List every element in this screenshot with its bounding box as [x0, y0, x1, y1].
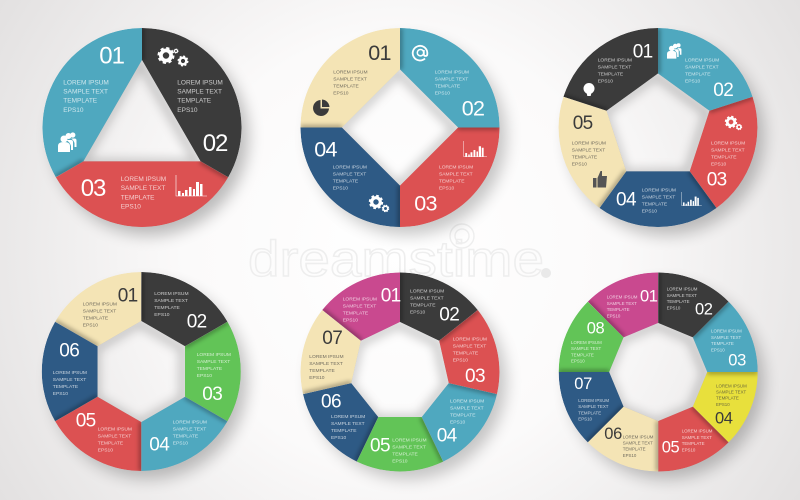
- segment 05: [357, 417, 443, 471]
- segment 04: [300, 128, 400, 227]
- text 03: EPS10: [121, 204, 141, 211]
- text 04: SAMPLE TEXT: [333, 171, 366, 177]
- text 02: LOREM IPSUM: [154, 292, 189, 297]
- text 01: TEMPLATE: [598, 71, 624, 77]
- segment 05: [658, 407, 729, 472]
- text 05: LOREM IPSUM: [682, 429, 712, 434]
- label 02: 02: [462, 97, 484, 121]
- label 02: 02: [695, 301, 713, 319]
- segment 03: [185, 322, 241, 421]
- text 03: EPS10: [711, 161, 727, 167]
- text 08: EPS10: [571, 359, 585, 364]
- segment 02: [400, 272, 478, 341]
- text 05: LOREM IPSUM: [392, 439, 427, 444]
- text 03: SAMPLE TEXT: [121, 185, 165, 192]
- segment 05: [55, 397, 141, 471]
- text 04: SAMPLE TEXT: [173, 426, 206, 432]
- text 01: EPS10: [333, 90, 349, 96]
- text 06: EPS10: [53, 391, 68, 397]
- text 02: SAMPLE TEXT: [667, 293, 697, 298]
- text 01: SAMPLE TEXT: [607, 301, 637, 306]
- text 03: TEMPLATE: [453, 351, 479, 357]
- text 04: TEMPLATE: [333, 178, 359, 184]
- segment 05: [559, 97, 626, 208]
- label 06: 06: [59, 341, 79, 362]
- text 05: SAMPLE TEXT: [392, 445, 426, 451]
- text 04: EPS10: [333, 185, 348, 191]
- text 05: SAMPLE TEXT: [682, 435, 712, 440]
- text 02: LOREM IPSUM: [667, 287, 697, 292]
- text 07: EPS10: [578, 417, 593, 422]
- text 01: LOREM IPSUM: [333, 70, 368, 75]
- label 03: 03: [465, 366, 485, 387]
- segment 04: [141, 397, 228, 471]
- text 02: TEMPLATE: [177, 98, 212, 105]
- text 04: EPS10: [716, 402, 730, 407]
- watermark: dreamstime: [248, 231, 544, 287]
- text 02: EPS10: [410, 309, 426, 315]
- text 01: SAMPLE TEXT: [333, 76, 367, 82]
- text 01: LOREM IPSUM: [598, 58, 632, 63]
- text 03: SAMPLE TEXT: [711, 335, 741, 340]
- text 04: SAMPLE TEXT: [642, 195, 675, 201]
- text 06: LOREM IPSUM: [623, 434, 653, 439]
- text 01: SAMPLE TEXT: [83, 308, 116, 314]
- segment 04: [422, 383, 497, 462]
- text 06: EPS10: [331, 435, 347, 441]
- text 07: LOREM IPSUM: [578, 398, 609, 403]
- icon: chart: [682, 192, 702, 206]
- text 04: EPS10: [642, 209, 657, 215]
- segment 03: [400, 128, 500, 227]
- text 03: EPS10: [453, 358, 468, 364]
- text 07: SAMPLE TEXT: [578, 404, 609, 409]
- text 07: LOREM IPSUM: [309, 355, 344, 360]
- label 01: 01: [640, 287, 658, 305]
- label 03: 03: [707, 170, 727, 191]
- text 06: SAMPLE TEXT: [331, 421, 365, 427]
- text 03: SAMPLE TEXT: [439, 171, 473, 177]
- chart: 7-part heptagon ring: [301, 272, 506, 479]
- text 05: LOREM IPSUM: [98, 428, 132, 433]
- text 01: SAMPLE TEXT: [63, 88, 108, 96]
- icon: bulb: [584, 83, 594, 96]
- chart: 6-part hexagon ring: [42, 272, 247, 479]
- label 02: 02: [187, 312, 207, 333]
- label 04: 04: [715, 409, 733, 427]
- chart: 5-part pentagon ring: [559, 28, 764, 235]
- label 04: 04: [149, 435, 170, 456]
- text 04: TEMPLATE: [450, 412, 476, 418]
- text 08: LOREM IPSUM: [571, 340, 602, 345]
- text 03: LOREM IPSUM: [711, 141, 745, 146]
- text 02: EPS10: [685, 78, 701, 84]
- text 02: EPS10: [177, 107, 198, 114]
- text 03: EPS10: [197, 373, 212, 379]
- text 06: TEMPLATE: [53, 384, 79, 390]
- text 06: EPS10: [623, 453, 637, 458]
- text 03: SAMPLE TEXT: [197, 359, 230, 365]
- label 01: 01: [368, 41, 391, 65]
- segment 06: [588, 407, 658, 472]
- text 01: SAMPLE TEXT: [598, 64, 631, 70]
- icon: pie: [313, 100, 330, 116]
- label 04: 04: [437, 426, 458, 447]
- text 02: TEMPLATE: [435, 83, 461, 89]
- text 05: SAMPLE TEXT: [98, 434, 131, 440]
- text 07: EPS10: [309, 375, 325, 381]
- text 04: SAMPLE TEXT: [450, 405, 484, 411]
- text 02: SAMPLE TEXT: [410, 295, 444, 301]
- text 01: LOREM IPSUM: [607, 295, 637, 300]
- text 02: TEMPLATE: [154, 305, 180, 311]
- text 06: TEMPLATE: [623, 447, 646, 452]
- label 03: 03: [202, 384, 222, 405]
- text 01: TEMPLATE: [607, 307, 630, 312]
- segment 01: [588, 272, 658, 337]
- text 05: EPS10: [98, 448, 113, 454]
- segment 03: [690, 97, 757, 208]
- text 01: EPS10: [83, 322, 98, 328]
- text 03: LOREM IPSUM: [453, 338, 487, 343]
- text 06: SAMPLE TEXT: [623, 440, 653, 446]
- text 02: LOREM IPSUM: [410, 289, 444, 294]
- text 05: TEMPLATE: [572, 154, 598, 160]
- text 02: TEMPLATE: [685, 71, 711, 77]
- label 01: 01: [381, 286, 401, 307]
- label 07: 07: [322, 328, 342, 349]
- icon: chart: [176, 175, 207, 196]
- text 06: LOREM IPSUM: [331, 415, 365, 420]
- segment 02: [658, 272, 729, 337]
- text 03: SAMPLE TEXT: [711, 147, 745, 153]
- text 07: TEMPLATE: [309, 368, 335, 374]
- text 04: LOREM IPSUM: [642, 189, 676, 194]
- text 07: SAMPLE TEXT: [309, 361, 343, 367]
- segment 02: [142, 28, 242, 177]
- text 03: LOREM IPSUM: [439, 165, 473, 170]
- label 04: 04: [314, 138, 338, 162]
- text 01: TEMPLATE: [63, 98, 98, 105]
- text 03: TEMPLATE: [711, 154, 737, 160]
- label 05: 05: [370, 436, 390, 457]
- icon: gears: [159, 48, 188, 66]
- label 03: 03: [414, 192, 438, 216]
- text 06: SAMPLE TEXT: [53, 377, 86, 383]
- label 04: 04: [616, 190, 637, 211]
- text 03: EPS10: [439, 185, 455, 191]
- segment 06: [303, 383, 378, 462]
- segment 02: [400, 28, 500, 128]
- text 05: TEMPLATE: [392, 452, 418, 458]
- label 06: 06: [604, 425, 622, 443]
- icon: thumb up: [593, 171, 607, 188]
- text 01: EPS10: [63, 107, 84, 114]
- icon: gears: [726, 117, 742, 130]
- text 03: TEMPLATE: [711, 341, 734, 346]
- label 08: 08: [587, 319, 604, 337]
- segment 04: [693, 372, 758, 442]
- label 03: 03: [81, 175, 106, 202]
- text 04: LOREM IPSUM: [333, 165, 367, 170]
- label 01: 01: [99, 42, 125, 69]
- segment 01: [322, 272, 400, 341]
- chart: 8-part octagon ring: [559, 272, 764, 479]
- text 03: LOREM IPSUM: [711, 329, 742, 334]
- text 05: EPS10: [392, 459, 408, 465]
- text 06: TEMPLATE: [331, 428, 357, 434]
- segment 02: [141, 272, 228, 346]
- segment 06: [42, 322, 98, 421]
- text 05: TEMPLATE: [98, 441, 124, 447]
- text 02: TEMPLATE: [667, 299, 690, 304]
- icon: gears: [370, 196, 389, 212]
- label 02: 02: [439, 304, 459, 325]
- text 02: LOREM IPSUM: [435, 70, 469, 75]
- text 03: TEMPLATE: [121, 194, 155, 201]
- text 01: LOREM IPSUM: [83, 302, 117, 307]
- segment 01: [563, 28, 658, 111]
- icon: people: [58, 132, 76, 152]
- label 02: 02: [713, 80, 733, 101]
- text 04: TEMPLATE: [716, 396, 739, 401]
- text 03: SAMPLE TEXT: [453, 344, 486, 350]
- text 05: TEMPLATE: [682, 441, 705, 446]
- label 03: 03: [728, 352, 746, 370]
- label 05: 05: [662, 438, 679, 456]
- text 04: LOREM IPSUM: [173, 420, 207, 425]
- text 01: EPS10: [607, 313, 621, 318]
- text 02: TEMPLATE: [410, 302, 436, 308]
- chart: 3-part triangle ring: [42, 28, 248, 235]
- segment 08: [559, 302, 624, 372]
- text 01: LOREM IPSUM: [63, 79, 109, 86]
- text 02: EPS10: [667, 305, 681, 310]
- text 04: TEMPLATE: [642, 202, 668, 208]
- text 03: TEMPLATE: [197, 366, 223, 372]
- segment 03: [56, 161, 228, 227]
- text 05: EPS10: [572, 161, 587, 167]
- text 04: LOREM IPSUM: [716, 383, 747, 388]
- text 05: SAMPLE TEXT: [572, 147, 605, 153]
- text 02: SAMPLE TEXT: [177, 88, 222, 96]
- segment 03: [439, 310, 499, 394]
- text 04: TEMPLATE: [173, 433, 199, 439]
- label 07: 07: [574, 375, 592, 393]
- segment 01: [55, 272, 141, 346]
- text 04: EPS10: [450, 419, 466, 425]
- chart: 4-part diamond ring: [300, 28, 506, 235]
- text 01: EPS10: [598, 78, 613, 84]
- label 05: 05: [76, 410, 96, 431]
- text 02: LOREM IPSUM: [177, 79, 223, 86]
- icon: chart: [464, 141, 487, 157]
- text 05: LOREM IPSUM: [572, 141, 606, 146]
- text 02: EPS10: [154, 312, 170, 318]
- text 08: TEMPLATE: [571, 352, 594, 357]
- text 01: SAMPLE TEXT: [343, 304, 376, 310]
- segment 07: [559, 372, 624, 442]
- text 03: LOREM IPSUM: [121, 176, 166, 183]
- text 07: TEMPLATE: [578, 410, 601, 415]
- icon: people: [667, 43, 681, 59]
- text 04: LOREM IPSUM: [450, 399, 484, 404]
- text 02: EPS10: [435, 90, 450, 96]
- label 02: 02: [203, 130, 228, 157]
- segment 02: [658, 28, 753, 111]
- label 06: 06: [321, 391, 341, 412]
- segment 01: [42, 28, 142, 177]
- text 01: TEMPLATE: [343, 311, 369, 317]
- icon: at sign: [413, 46, 427, 60]
- label 01: 01: [633, 42, 653, 63]
- label 05: 05: [573, 113, 593, 134]
- text 01: LOREM IPSUM: [343, 298, 377, 303]
- text 01: TEMPLATE: [333, 83, 359, 89]
- text 02: SAMPLE TEXT: [685, 64, 719, 70]
- text 02: SAMPLE TEXT: [435, 76, 468, 82]
- segment 03: [693, 302, 758, 372]
- text 06: LOREM IPSUM: [53, 371, 87, 376]
- text 03: TEMPLATE: [439, 178, 465, 184]
- segment 04: [600, 171, 716, 227]
- text 01: EPS10: [343, 318, 358, 324]
- text 02: SAMPLE TEXT: [154, 298, 188, 304]
- text 08: SAMPLE TEXT: [571, 346, 601, 351]
- text 04: EPS10: [173, 440, 188, 446]
- text 05: EPS10: [682, 447, 696, 452]
- text 03: EPS10: [711, 347, 725, 352]
- segment 07: [301, 310, 361, 394]
- text 01: TEMPLATE: [83, 315, 109, 321]
- label 01: 01: [118, 286, 138, 307]
- text 03: LOREM IPSUM: [197, 353, 231, 358]
- text 04: SAMPLE TEXT: [716, 390, 746, 394]
- segment 01: [300, 28, 400, 128]
- text 02: LOREM IPSUM: [685, 58, 719, 63]
